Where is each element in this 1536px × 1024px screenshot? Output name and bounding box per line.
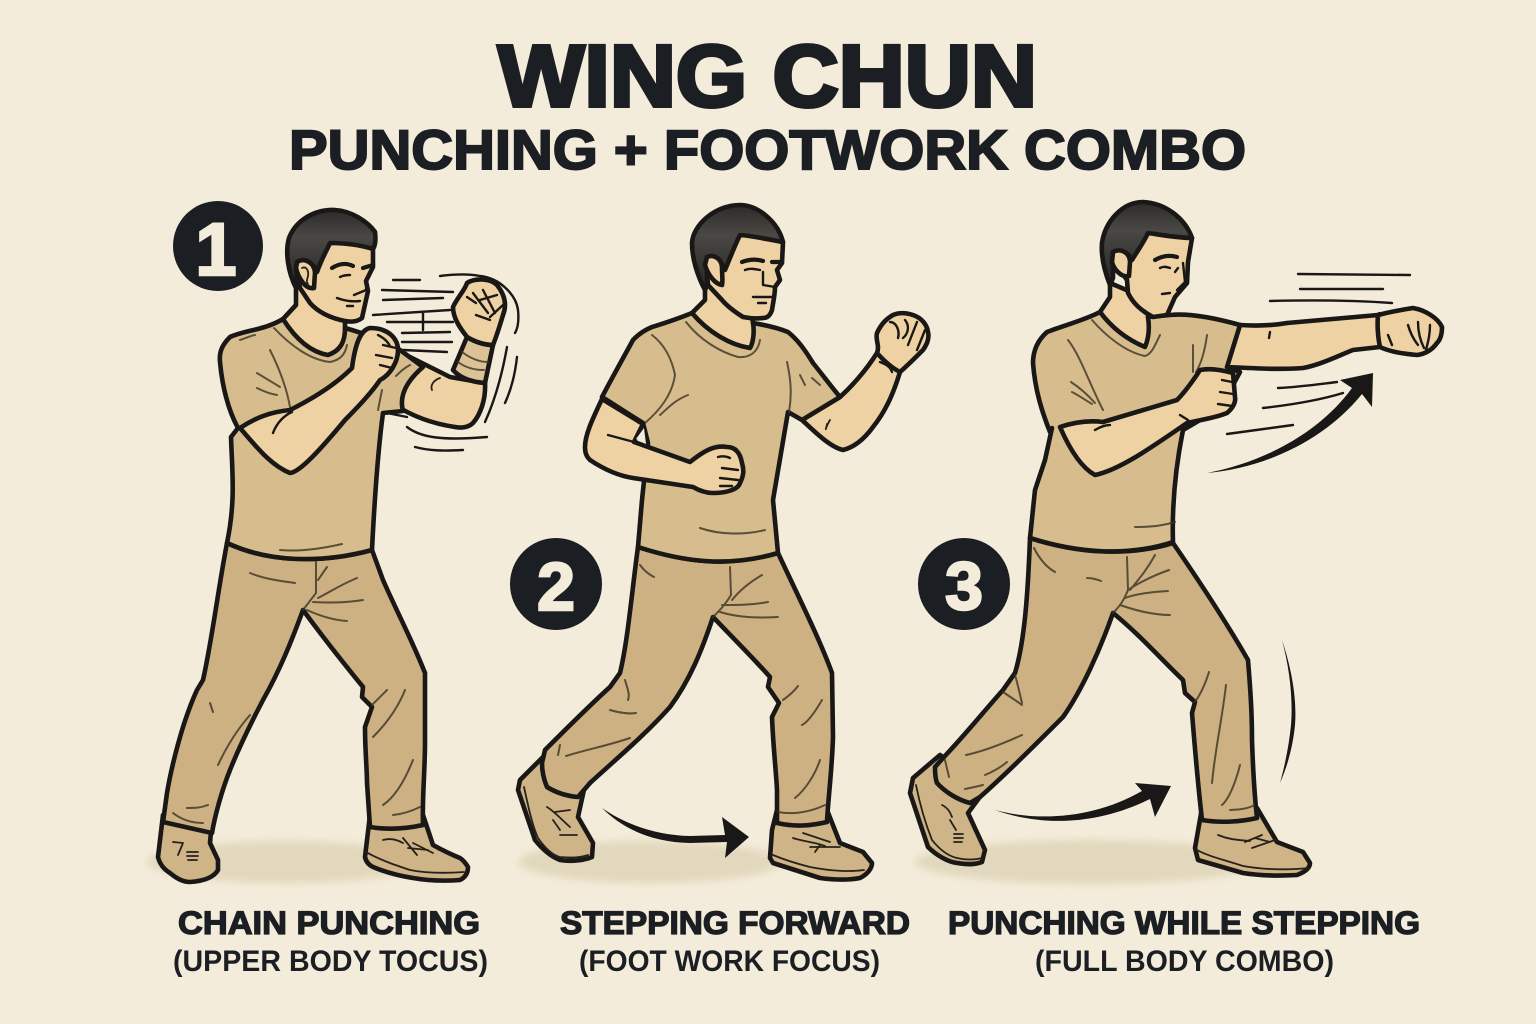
- arrow: step direction: [995, 783, 1171, 821]
- caption 1: (UPPER BODY TOCUS): [173, 945, 488, 978]
- badge 1: 1: [195, 208, 237, 291]
- subtitle: PUNCHING + FOOTWORK COMBO: [289, 118, 1246, 181]
- caption 2: (FOOT WORK FOCUS): [579, 945, 880, 978]
- ground shadow 2: [518, 841, 782, 883]
- head 3: [1102, 202, 1192, 317]
- neck 1: [275, 285, 358, 372]
- figure 2: [518, 205, 928, 880]
- fold arm 2: [585, 399, 743, 493]
- panel: step 1 chain punching: [147, 201, 518, 978]
- arrow: forward step: [602, 808, 749, 858]
- front fist: [453, 279, 505, 345]
- panel: step 2 stepping forward: [510, 205, 928, 978]
- wristband: [453, 337, 493, 383]
- caption 3: (FULL BODY COMBO): [1035, 945, 1334, 978]
- caption 1: CHAIN PUNCHING: [178, 905, 480, 941]
- head 1: [287, 210, 375, 322]
- small gap behind arm: [636, 428, 646, 444]
- panel: step 3 punching while stepping: [910, 202, 1442, 978]
- neck 2: [680, 283, 768, 367]
- caption 2: STEPPING FORWARD: [560, 905, 910, 941]
- badge 2: [510, 538, 602, 630]
- badge 1: [173, 201, 263, 291]
- ground shadow 1: [147, 841, 423, 883]
- ground shadow 3: [915, 840, 1265, 884]
- guard arm 1: [240, 328, 398, 473]
- caption 3: PUNCHING WHILE STEPPING: [948, 905, 1420, 941]
- figure 3: [910, 202, 1442, 876]
- head 2: [692, 205, 783, 318]
- title: WING CHUN: [498, 28, 1037, 125]
- figure 1: [158, 210, 505, 882]
- motion arc: rear leg: [1280, 640, 1295, 783]
- long punching arm: [1227, 314, 1381, 369]
- caption 1: [173, 905, 488, 978]
- motion lines 3: [1227, 274, 1410, 434]
- badge 3: [918, 538, 1010, 630]
- neck 3: [1088, 283, 1166, 366]
- badge 3: 3: [945, 548, 983, 624]
- badge 2: 2: [537, 549, 575, 625]
- caption 3: [948, 905, 1420, 978]
- front fist 2: [877, 313, 928, 372]
- caption 2: [560, 905, 910, 978]
- shirt 3: [1030, 312, 1240, 551]
- shirt 1: [220, 319, 423, 559]
- fist 3: [1378, 308, 1442, 355]
- arrow: punch direction: [1207, 373, 1373, 473]
- back arm 2: [802, 353, 900, 450]
- shirt 2: [602, 313, 840, 562]
- motion lines 1: [373, 274, 518, 451]
- bent arm 3: [1060, 369, 1235, 475]
- back arm 1: [395, 352, 485, 428]
